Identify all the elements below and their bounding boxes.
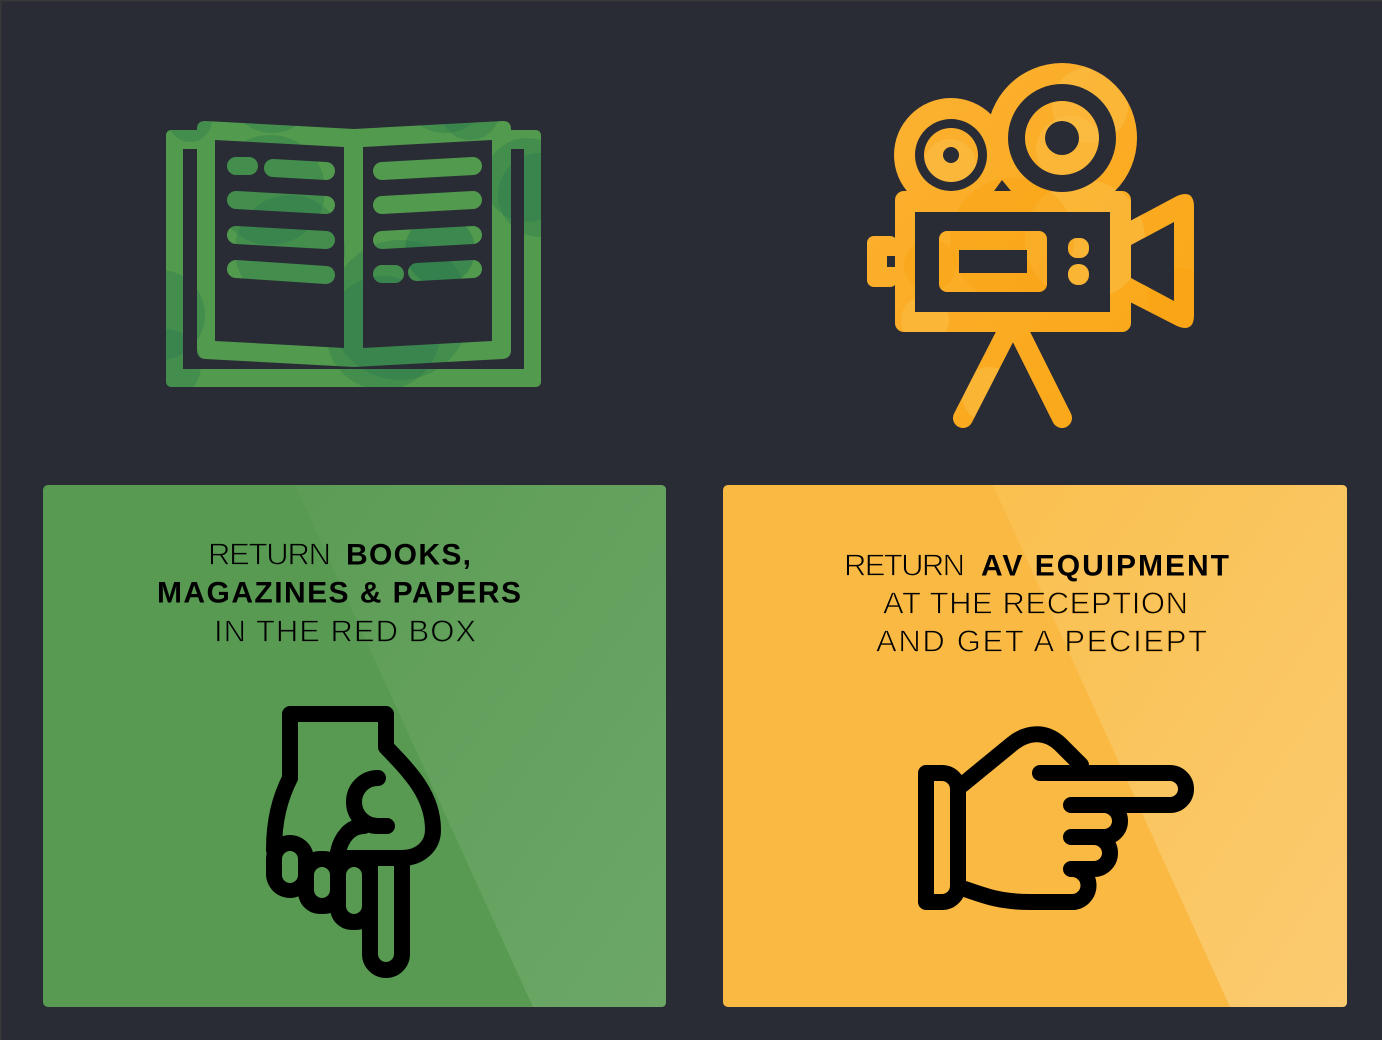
panel light diagonal <box>295 485 666 1007</box>
heading: return books text <box>157 536 521 648</box>
heading: return books text: MAGAZINES & PAPERS <box>157 576 521 610</box>
panel: return books <box>43 485 666 1007</box>
heading: return av text: AND GET A PECIEPT <box>876 624 1207 658</box>
icon: hand pointing down <box>266 714 433 970</box>
heading: return av text <box>844 548 1229 658</box>
icon: open book <box>166 121 541 387</box>
panel: return av equipment <box>723 485 1347 1007</box>
icon: film camera <box>867 63 1194 428</box>
panel light diagonal <box>993 485 1347 1007</box>
heading: return av text: AV EQUIPMENT <box>981 550 1229 582</box>
heading: return books text: IN THE RED BOX <box>214 614 476 648</box>
heading: return av text: RETURN <box>844 548 965 582</box>
icon: hand pointing right <box>926 734 1186 902</box>
heading: return books text: RETURN <box>208 536 331 572</box>
heading: return books text: BOOKS, <box>346 538 471 572</box>
heading: return av text: AT THE RECEPTION <box>883 586 1188 620</box>
